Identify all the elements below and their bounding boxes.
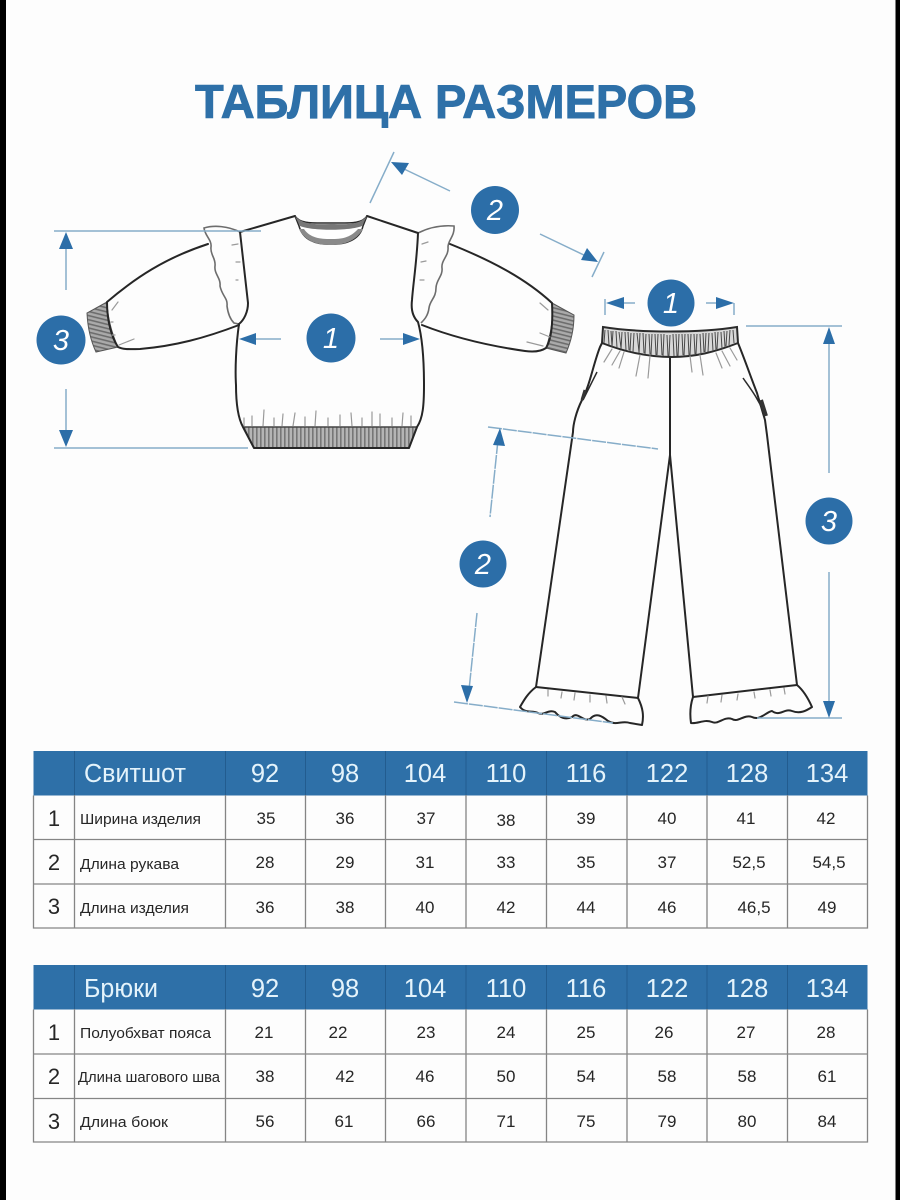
table header: trousers: 104 [404, 975, 446, 1003]
trousers: ruffle gathers [548, 688, 785, 704]
row: side length: 80 [738, 1112, 756, 1131]
row: side length [48, 1109, 836, 1134]
sweatshirt: left sleeve [107, 244, 239, 349]
table header: trousers: 134 [806, 975, 848, 1003]
trousers measure 3 [746, 326, 852, 718]
row: side length: 61 [335, 1112, 353, 1131]
table: trousers sizes [34, 965, 868, 1142]
row: sleeve: 33 [497, 853, 515, 872]
trousers drawing [520, 327, 812, 725]
table header: trousers: 116 [566, 975, 606, 1003]
row: inseam: 50 [497, 1067, 515, 1086]
row: waist: 27 [737, 1023, 755, 1042]
table header: sweatshirt: 98 [331, 760, 359, 788]
table header: trousers: 122 [646, 975, 688, 1003]
row: width: 42 [817, 809, 835, 828]
row: inseam: 2 [48, 1064, 60, 1089]
table: sweatshirt sizes [34, 751, 868, 928]
row: sleeve: 29 [336, 853, 354, 872]
row: width: 1 [48, 806, 60, 831]
trousers: gathers and pockets [604, 348, 737, 378]
row: side length: 3 [48, 1109, 60, 1134]
row: length: 49 [818, 898, 836, 917]
row: sleeve: 28 [256, 853, 274, 872]
table header: trousers: 98 [331, 975, 359, 1003]
trousers measure 3: 3 [821, 506, 837, 538]
trousers: outline [536, 343, 797, 698]
row: waist: 24 [497, 1023, 515, 1042]
row: width: 37 [417, 809, 435, 828]
row: length: 44 [577, 898, 595, 917]
table header: trousers: Брюки [84, 975, 158, 1003]
sweatshirt measure 2: 2 [486, 195, 503, 227]
row: sleeve [48, 850, 846, 875]
row: sleeve: 35 [577, 853, 595, 872]
row: waist: Полуобхват пояса [80, 1025, 212, 1042]
row: width: 36 [336, 809, 354, 828]
row: inseam: 61 [818, 1067, 836, 1086]
row: inseam: Длина шагового шва [78, 1069, 221, 1086]
sweatshirt measure 3 [36, 231, 261, 448]
sweatshirt measure 1 [239, 314, 420, 362]
row: length: 38 [336, 898, 354, 917]
row: waist: 23 [417, 1023, 435, 1042]
title: ТАБЛИЦА РАЗМЕРОВ [195, 75, 697, 128]
row: width: 41 [737, 809, 755, 828]
row: width: Ширина изделия [80, 811, 201, 828]
row: width: 35 [257, 809, 275, 828]
table header: sweatshirt: 122 [646, 760, 688, 788]
table grid: trousers [34, 1009, 868, 1142]
trousers measure 1 [605, 280, 734, 326]
sweatshirt measure 2 [370, 152, 604, 277]
trousers: waistband [602, 327, 738, 357]
sweatshirt: hem rib [243, 427, 417, 448]
row: side length: 75 [577, 1112, 595, 1131]
row: waist [48, 1020, 835, 1045]
row: side length: Длина боюк [80, 1114, 168, 1131]
sweatshirt: left ruffle [204, 226, 240, 324]
table header: trousers [34, 965, 868, 1010]
row: waist: 25 [577, 1023, 595, 1042]
row: length: 40 [416, 898, 434, 917]
row: inseam: 46 [416, 1067, 434, 1086]
row: waist: 21 [255, 1023, 273, 1042]
trousers: center seam [669, 357, 671, 455]
sweatshirt drawing [87, 216, 574, 448]
row: width: 40 [658, 809, 676, 828]
row: inseam: 58 [658, 1067, 676, 1086]
table header: trousers: 110 [486, 975, 526, 1003]
row: width: 39 [577, 809, 595, 828]
row: side length: 79 [658, 1112, 676, 1131]
sweatshirt: collar [295, 216, 367, 245]
row: side length: 66 [417, 1112, 435, 1131]
row: length: Длина изделия [80, 900, 189, 917]
table header: sweatshirt: 128 [726, 760, 768, 788]
row: width: 38 [497, 811, 515, 830]
row: waist: 22 [329, 1023, 347, 1042]
row: inseam: 54 [577, 1067, 595, 1086]
row: inseam: 42 [336, 1067, 354, 1086]
row: waist: 26 [655, 1023, 673, 1042]
table header: sweatshirt: 92 [251, 760, 279, 788]
row: sleeve: 54,5 [812, 853, 846, 872]
table header: trousers: 128 [726, 975, 768, 1003]
table header: sweatshirt: 134 [806, 760, 848, 788]
sweatshirt: body [236, 216, 424, 448]
row: inseam: 58 [738, 1067, 756, 1086]
row: length: 42 [497, 898, 515, 917]
trousers: right ruffle [690, 685, 812, 723]
table header: sweatshirt: 116 [566, 760, 606, 788]
row: sleeve: 2 [48, 850, 60, 875]
table grid: sweatshirt [34, 795, 868, 928]
trousers measure 2 [454, 427, 658, 723]
row: side length: 71 [497, 1112, 515, 1131]
row: sleeve: 31 [416, 853, 434, 872]
table header: sweatshirt: 110 [486, 760, 526, 788]
table header: sweatshirt [34, 751, 868, 796]
sweatshirt: right ruffle [418, 226, 454, 323]
row: width [48, 806, 835, 831]
trousers: left ruffle [520, 687, 643, 725]
row: length: 36 [256, 898, 274, 917]
row: sleeve: 52,5 [732, 853, 766, 872]
row: length: 3 [48, 894, 60, 919]
row: sleeve: Длина рукава [80, 856, 180, 873]
table header: sweatshirt: 104 [404, 760, 446, 788]
trousers measure 2: 2 [474, 549, 491, 581]
trousers measure 1: 1 [663, 288, 679, 320]
row: length: 46,5 [737, 898, 771, 917]
sweatshirt: left cuff [87, 302, 118, 352]
table header: sweatshirt: Свитшот [84, 760, 186, 788]
row: side length: 84 [818, 1112, 836, 1131]
row: waist: 1 [48, 1020, 60, 1045]
row: waist: 28 [817, 1023, 835, 1042]
sweatshirt: gathers [111, 242, 550, 426]
row: side length: 56 [256, 1112, 274, 1131]
row: sleeve: 37 [658, 853, 676, 872]
sweatshirt measure 3: 3 [53, 325, 69, 357]
table header: trousers: 92 [251, 975, 279, 1003]
row: length: 46 [658, 898, 676, 917]
sweatshirt: right cuff [546, 303, 574, 353]
row: inseam [48, 1064, 836, 1089]
row: length [48, 894, 836, 919]
sweatshirt: right sleeve [422, 244, 552, 352]
row: inseam: 38 [256, 1067, 274, 1086]
sweatshirt measure 1: 1 [323, 323, 339, 355]
